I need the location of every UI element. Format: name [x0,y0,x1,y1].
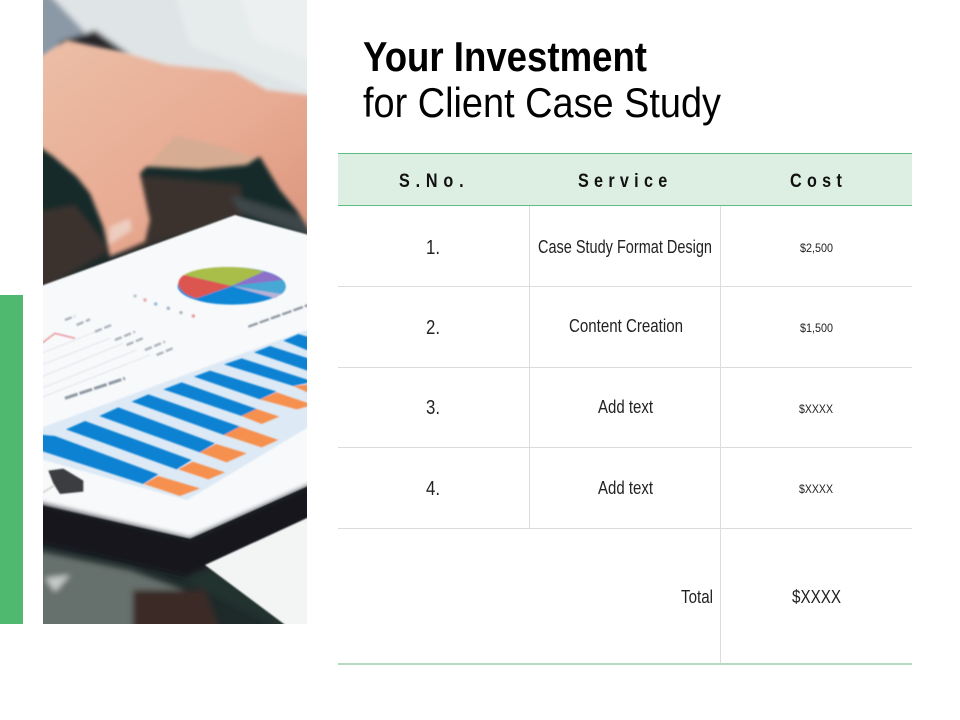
photo: white tabletop [204,516,307,624]
row 4: 4. [426,478,440,500]
table [338,153,912,665]
photo: light chart band [43,330,307,500]
photo: folder and glass table [43,482,307,624]
table header [338,153,912,206]
title: Your Investment [363,33,647,80]
table header: S.No. [399,170,464,191]
row 4: Add text [598,478,653,498]
row 3: 3. [426,397,440,419]
table header: Cost [790,170,842,191]
title: for Client Case Study [363,79,721,126]
row 1: $2,500 [800,241,833,255]
row 2 [426,316,833,339]
row 4: $XXXX [799,482,833,496]
table header: Service [578,170,667,191]
photo: small print on report [42,305,308,398]
title [363,33,721,126]
row 4 [426,478,833,500]
legend dots [133,294,195,318]
photo: hand [30,40,320,257]
row 2: Content Creation [569,316,683,336]
photo: bar chart on report [33,334,313,496]
total row: Total [681,587,713,607]
total row: $XXXX [792,587,841,607]
row 3: $XXXX [799,402,833,416]
row 3: Add text [598,397,653,417]
photo: binder clip [42,469,83,494]
photo: dark table [43,176,307,286]
photo: report paper [30,215,320,539]
photo: pie chart [133,267,286,318]
accent bar [0,295,23,624]
row 2: 2. [426,317,440,339]
row 1: 1. [426,237,440,259]
photo: hand over financial report [43,0,307,624]
row 3 [426,397,833,419]
row 2: $1,500 [800,321,833,335]
photo: shirt [43,0,307,98]
total row [681,587,841,607]
row 1: Case Study Format Design [538,237,712,257]
row 1 [426,237,833,259]
